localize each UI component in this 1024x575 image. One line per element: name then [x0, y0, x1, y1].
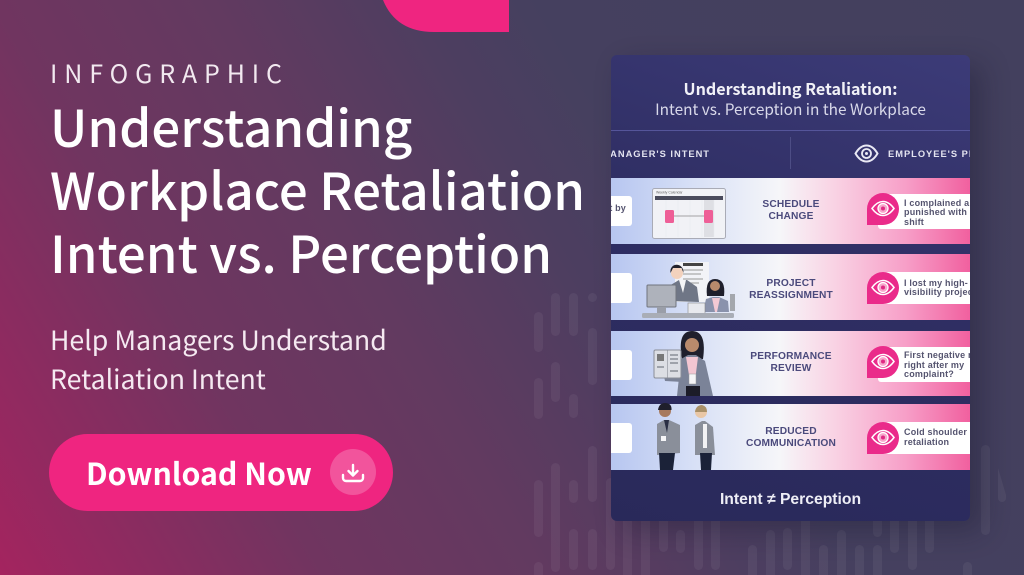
row label — [749, 278, 833, 300]
button label: Download Now — [86, 450, 312, 494]
row label: REDUCED — [765, 426, 817, 437]
perception text — [904, 350, 970, 379]
subtitle — [50, 319, 387, 397]
illustration: two colleagues back to back — [657, 403, 715, 470]
card heading: Understanding Retaliation: — [684, 76, 897, 100]
eyebrow label: INFOGRAPHIC — [50, 55, 289, 91]
subtitle: Help Managers Understand — [50, 319, 387, 358]
row: reduced communication — [611, 404, 970, 470]
perception text: retaliation — [904, 437, 949, 447]
icon: eye badge — [867, 346, 899, 378]
perception note — [878, 347, 970, 382]
main title: Intent vs. Perception — [50, 214, 552, 288]
icon: eye badge — [867, 422, 899, 454]
decorative pink corner shape — [383, 0, 509, 32]
row: project reassignment — [611, 254, 970, 320]
row label — [762, 199, 820, 222]
column divider — [790, 137, 791, 169]
card footer text: Intent ≠ Perception — [720, 491, 861, 508]
intent note — [611, 350, 632, 380]
perception text — [904, 427, 970, 447]
intent note — [611, 423, 632, 453]
perception text: right after my — [904, 360, 964, 370]
intent note — [611, 196, 632, 226]
panel: infographic preview card — [611, 55, 970, 521]
row: performance review — [611, 331, 970, 396]
icon: eye badge — [867, 272, 899, 304]
row label: REASSIGNMENT — [749, 290, 833, 300]
illustration: employee holding report — [654, 331, 713, 396]
row label — [750, 350, 832, 374]
perception text — [904, 198, 970, 227]
icon: download — [330, 449, 376, 495]
intent note — [611, 273, 632, 303]
row label: CHANGE — [768, 211, 814, 222]
card subheading: Intent vs. Perception in the Workplace — [655, 98, 926, 120]
perception text: I lost my high- — [904, 278, 968, 288]
download button — [49, 434, 393, 511]
main title — [50, 88, 585, 288]
icon: eye badge — [867, 193, 899, 225]
row label: COMMUNICATION — [746, 438, 836, 449]
subtitle: Retaliation Intent — [50, 358, 266, 397]
illustration: weekly calendar — [652, 188, 726, 239]
illustration: weekly calendar: Weekly Calendar — [656, 190, 683, 194]
perception text: complaint? — [904, 369, 954, 379]
row: schedule change — [611, 178, 970, 244]
perception text — [904, 278, 970, 297]
illustration: manager and employee at desk — [642, 262, 735, 318]
icon: eye header — [854, 144, 879, 162]
header rule — [611, 130, 970, 131]
perception text: shift — [904, 217, 924, 227]
row label — [746, 426, 836, 449]
row label: PERFORMANCE — [750, 350, 832, 362]
perception note — [878, 272, 970, 304]
perception note — [878, 422, 970, 454]
perception note — [878, 194, 970, 229]
row label: PROJECT — [766, 278, 816, 288]
row label: REVIEW — [770, 362, 812, 374]
main title: Understanding — [50, 88, 412, 162]
row label: SCHEDULE — [762, 199, 820, 210]
main title: Workplace Retaliation — [50, 151, 585, 225]
